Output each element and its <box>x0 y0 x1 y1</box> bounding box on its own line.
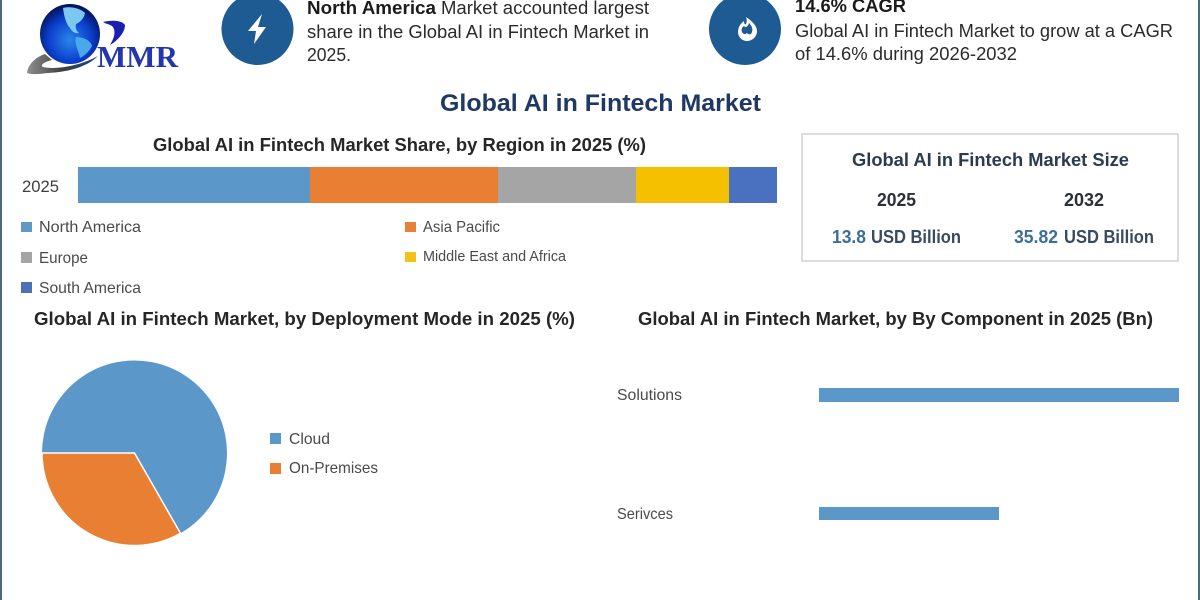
legend: regions: North America <box>39 219 141 236</box>
legend: deployment mode: On-Premises <box>289 460 378 477</box>
panel: market size: 2025 <box>877 190 916 210</box>
callout: CAGR <box>795 0 1173 64</box>
callout: CAGR: Global AI in Fintech Market to grow at a CAGR <box>795 21 1173 41</box>
panel: market size: USD Billion <box>1064 227 1154 247</box>
callout: CAGR: of 14.6% during 2026-2032 <box>795 44 1017 64</box>
heading: component chart: Global AI in Fintech Market, by By Component in 2025 (Bn) <box>638 309 1153 329</box>
callout: North America share: 2025. <box>307 45 351 65</box>
panel: market size: Global AI in Fintech Market Size <box>852 150 1129 170</box>
heading: deployment mode chart: Global AI in Fintech Market, by Deployment Mode in 2025 (%) <box>34 309 575 329</box>
legend: regions <box>21 219 567 297</box>
legend: deployment mode <box>270 431 378 477</box>
title: Global AI in Fintech Market <box>440 90 761 117</box>
legend: regions: Europe <box>39 250 88 267</box>
logo: MMR globe: MMR <box>97 39 179 74</box>
panel: market size: 2032 <box>1064 190 1104 210</box>
legend: regions: South America <box>39 280 141 297</box>
icon: lightning bolt circle <box>222 0 294 65</box>
panel: market size: 35.82 <box>1014 227 1058 247</box>
bar chart: component: Serivces <box>617 506 673 523</box>
panel: market size <box>802 134 1178 261</box>
pie chart: deployment mode <box>42 360 227 546</box>
legend: regions: Middle East and Africa <box>423 248 567 265</box>
logo: MMR globe <box>27 4 179 74</box>
legend: deployment mode: Cloud <box>289 431 330 448</box>
stacked bar chart: region share: 2025 <box>22 177 59 196</box>
panel: market size: USD Billion <box>871 227 961 247</box>
callout: North America share <box>307 0 649 65</box>
heading: region share chart: Global AI in Fintech Market Share, by Region in 2025 (%) <box>153 135 646 155</box>
bar chart: component: Solutions <box>617 387 682 404</box>
icon: flame drop circle <box>709 0 781 65</box>
panel: market size: 13.8 <box>832 227 866 247</box>
stacked bar chart: region share <box>22 167 777 203</box>
bar chart: component <box>617 387 1179 523</box>
callout: North America share: share in the Global AI in Fintech Market in <box>307 22 649 42</box>
legend: regions: Asia Pacific <box>423 219 500 236</box>
